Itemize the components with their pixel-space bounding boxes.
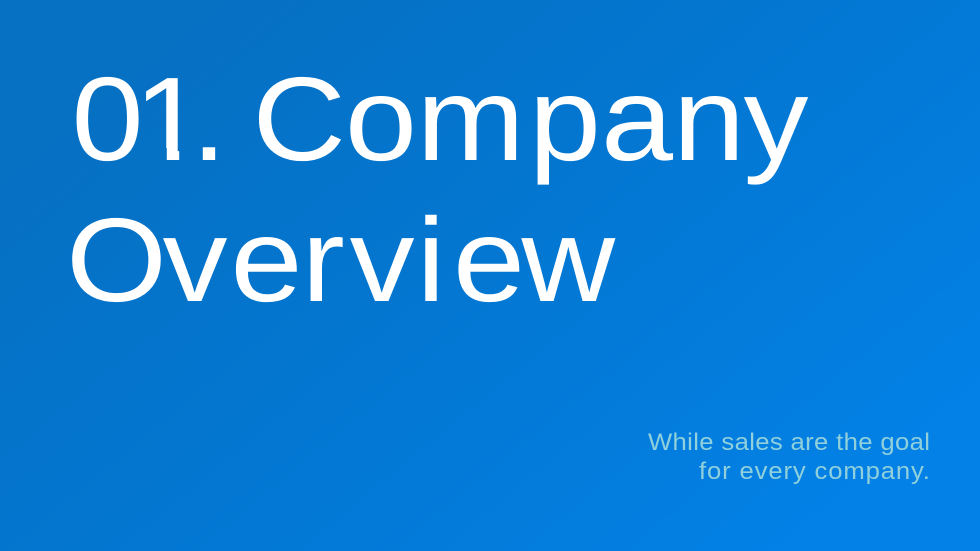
subtitle line 2: for every company. [699, 459, 930, 485]
title line 1: 01. Company [72, 53, 808, 186]
subtitle text block [648, 430, 930, 485]
title line 2: Overview [66, 194, 616, 327]
title [66, 53, 808, 327]
subtitle line 1: While sales are the goal [648, 430, 930, 456]
